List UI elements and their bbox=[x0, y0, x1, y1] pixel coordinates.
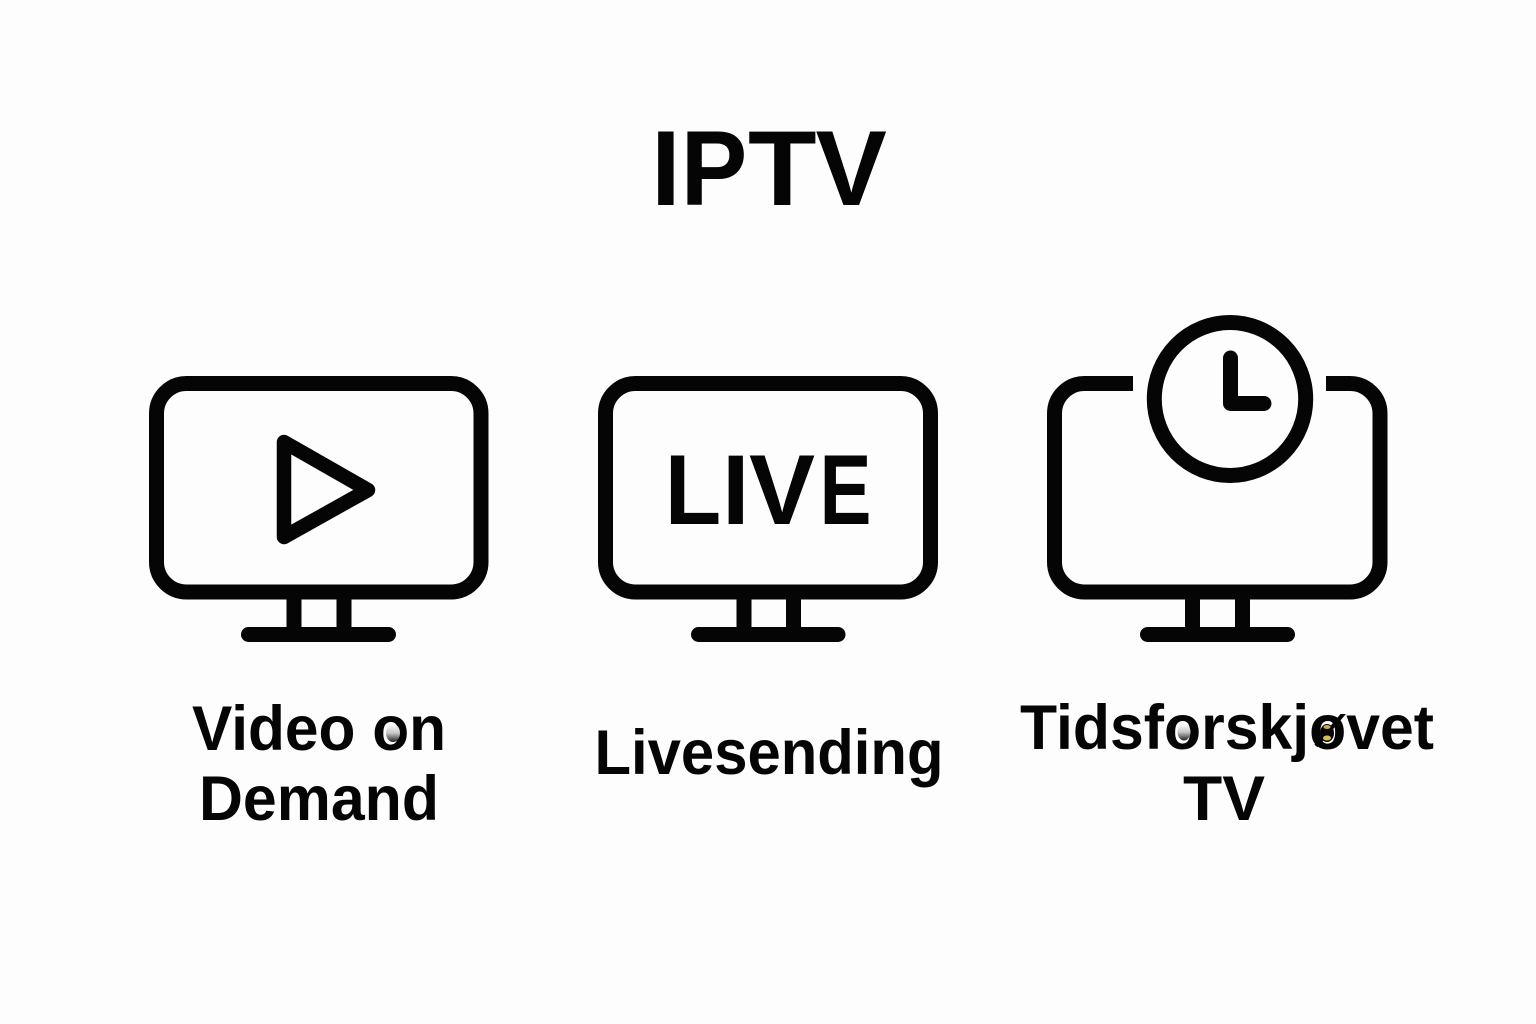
label: video on demand: Demand bbox=[199, 764, 439, 834]
title: P bbox=[681, 108, 747, 228]
title: V bbox=[816, 108, 887, 228]
label: video on demand bbox=[192, 694, 446, 834]
label: live broadcast: Livesending bbox=[594, 718, 944, 788]
icon: video on demand TV with play button bbox=[156, 384, 481, 634]
icon: live TV bbox=[606, 384, 930, 634]
icon: live TV: I bbox=[722, 434, 750, 545]
icon: live TV: L bbox=[665, 434, 721, 545]
label: time-shifted TV bbox=[1020, 693, 1434, 834]
title: T bbox=[748, 108, 817, 228]
title bbox=[651, 108, 887, 228]
label: video on demand: Video on bbox=[192, 694, 446, 764]
icon: live TV: E bbox=[820, 434, 872, 545]
icon: live TV: V bbox=[749, 434, 815, 545]
icon: time-shifted TV with clock bbox=[1054, 322, 1380, 634]
label: time-shifted TV: TV bbox=[1183, 764, 1265, 834]
label: time-shifted TV: Tidsforskjøvet bbox=[1020, 693, 1434, 763]
title: I bbox=[651, 108, 681, 228]
